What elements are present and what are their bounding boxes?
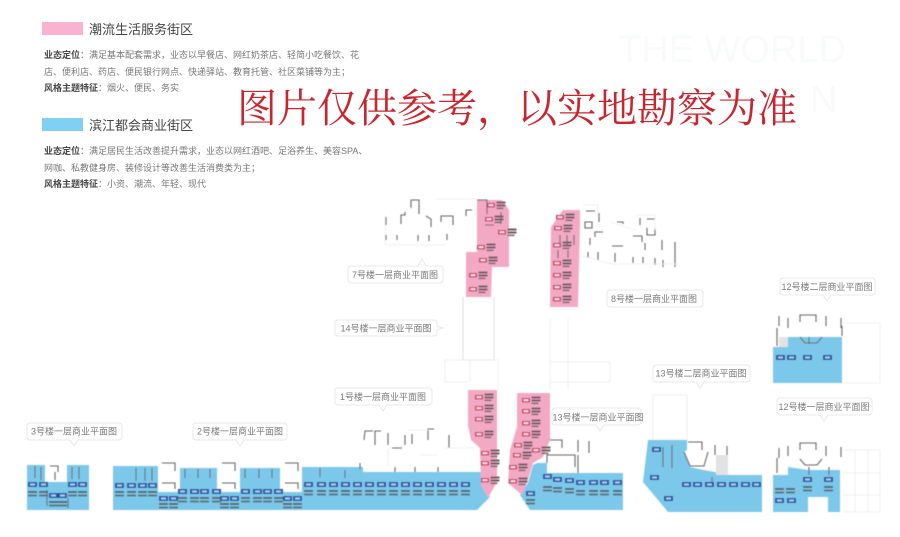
pink zone description: 风格主题特征：烟火、便民、务实 xyxy=(44,82,179,93)
blue zone description: 业态定位：满足居民生活改善提升需求，业态以网红酒吧、足浴养生、美容SPA、 xyxy=(44,145,367,156)
legend: blue street zone xyxy=(42,118,367,189)
legend swatch: pink xyxy=(42,22,83,35)
legend swatch: blue xyxy=(42,118,83,131)
plan: building 12 floor 1 xyxy=(773,443,880,512)
floor plans xyxy=(27,199,880,512)
callout: building 3 floor 1: 3号楼一层商业平面图 xyxy=(31,426,117,436)
plan: building 8 floor 1 xyxy=(550,205,678,307)
callout: building 2 floor 1 xyxy=(193,423,287,446)
callout: building 13 floor 2: 13号楼二层商业平面图 xyxy=(655,368,747,378)
faint background lettering: THE WORLD xyxy=(618,29,846,71)
pink zone description: 业态定位：满足基本配套需求，业态以早餐店、网红奶茶店、轻简小吃餐饮、花 xyxy=(44,49,359,60)
faint background lettering xyxy=(618,29,846,121)
legend: pink street zone xyxy=(42,22,359,93)
blue zone description: 网咖、私教健身房、装修设计等改善生活消费类为主； xyxy=(44,162,260,173)
callout: building 12 floor 2: 12号楼二层商业平面图 xyxy=(781,281,873,292)
plan: building 14 floor 1 outline xyxy=(445,297,498,390)
callout: building 8 floor 1: 8号楼一层商业平面图 xyxy=(611,293,697,304)
legend heading: pink zone: 潮流生活服务街区 xyxy=(89,22,193,37)
plan: building 3 floor 1 xyxy=(27,465,89,510)
callout: building 8 floor 1 xyxy=(607,290,703,307)
plan: pink wing of building 1 xyxy=(468,390,500,498)
plan: building 13 floor 1 xyxy=(520,440,623,510)
plan: outline below building 8 xyxy=(550,318,610,390)
blue zone description: 风格主题特征：小资、潮流、年轻、现代 xyxy=(44,178,206,189)
callout: building 7 floor 1: 7号楼一层商业平面图 xyxy=(352,269,438,280)
plan: building 2 floor 1 xyxy=(113,463,304,510)
callout: building 2 floor 1: 2号楼一层商业平面图 xyxy=(197,426,283,436)
plan: building 1 floor 1 xyxy=(302,429,490,510)
callout: building 12 floor 1 xyxy=(777,398,872,421)
blue zone description xyxy=(44,145,367,189)
callout: building 3 floor 1 xyxy=(27,423,122,446)
faint background lettering: N xyxy=(810,79,837,121)
callout: building 14 floor 1 xyxy=(335,320,443,336)
callout: building 7 floor 1 xyxy=(348,259,443,283)
callout: building 14 floor 1: 14号楼一层商业平面图 xyxy=(340,322,432,334)
callout: building 12 floor 2 xyxy=(780,278,875,301)
plan: pink wing of building 13 xyxy=(508,393,550,495)
plan: building 13 floor 2 xyxy=(643,395,762,512)
plan: building 7 floor 1 xyxy=(385,199,516,297)
watermark notice: 图片仅供参考，以实地勘察为准 xyxy=(237,86,797,131)
callout: building 13 floor 1 xyxy=(552,408,644,431)
callout: building 1 floor 1 xyxy=(335,388,432,411)
callout: building 12 floor 1: 12号楼一层商业平面图 xyxy=(778,401,870,412)
plan: building 12 floor 2 xyxy=(773,315,880,383)
legend heading: blue zone: 滨江都会商业街区 xyxy=(89,118,193,133)
callout: building 13 floor 2 xyxy=(653,365,750,388)
pink zone description xyxy=(44,49,359,93)
callout: building 13 floor 1: 13号楼一层商业平面图 xyxy=(552,412,644,422)
callout: building 1 floor 1: 1号楼一层商业平面图 xyxy=(340,391,426,402)
pink zone description: 店、便利店、药店、便民银行网点、快递驿站、教育托管、社区菜铺等为主； xyxy=(44,66,350,77)
